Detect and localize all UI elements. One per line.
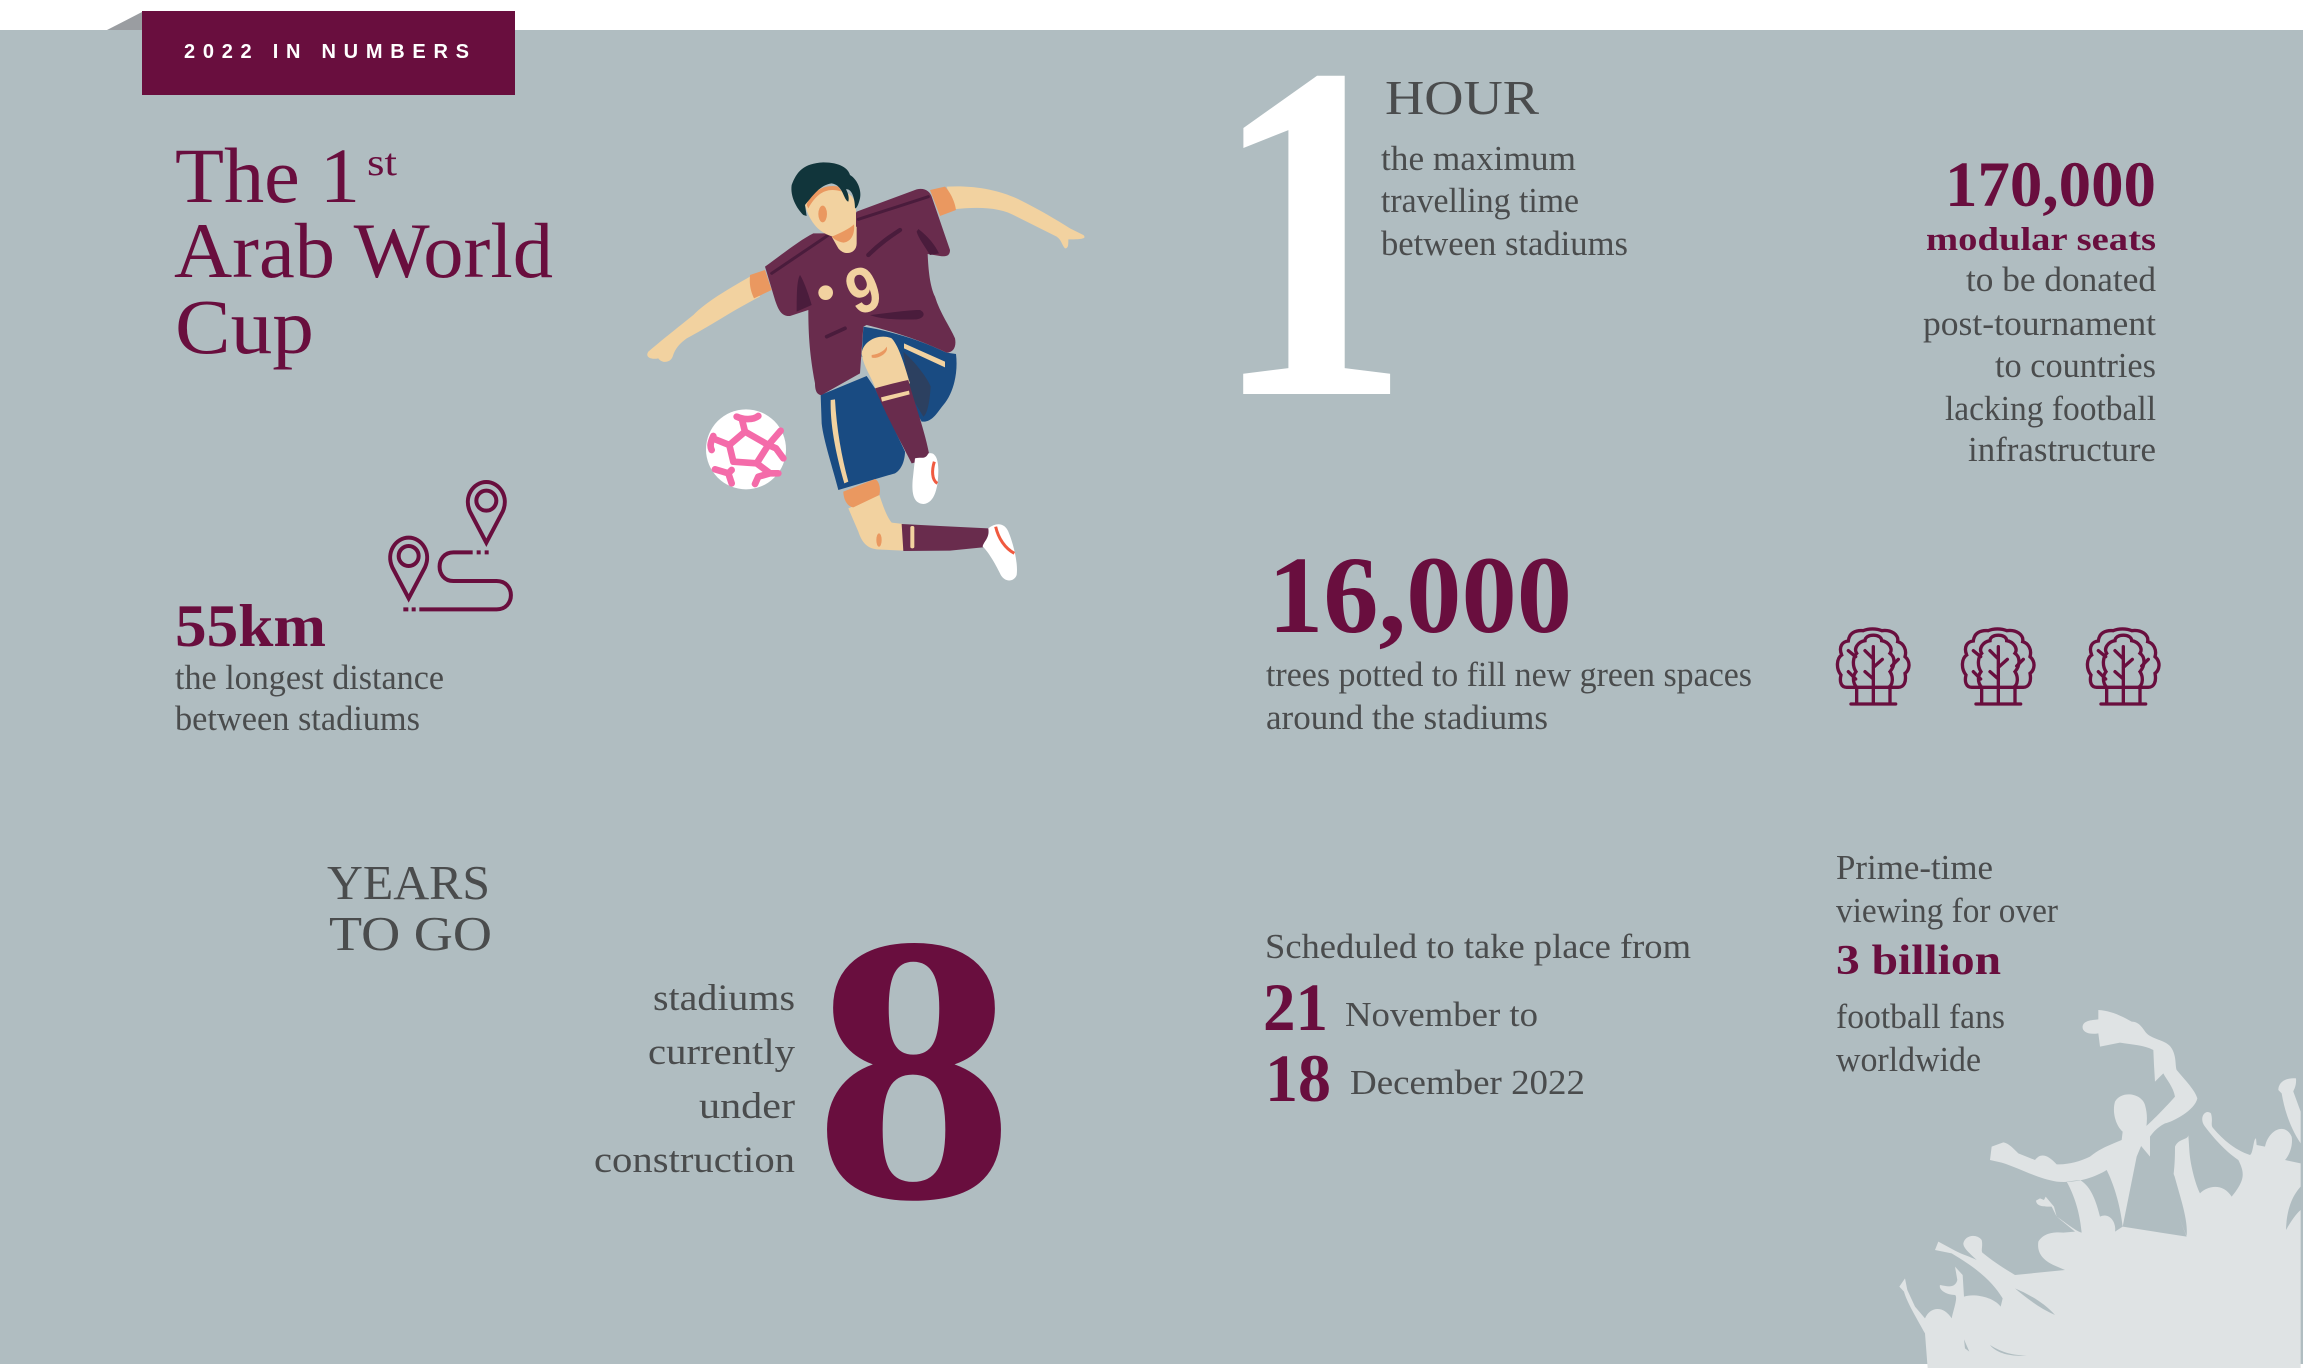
left arm: [647, 277, 760, 362]
16,000 trees stat: trees potted to fill new green spaces: [1266, 655, 1752, 694]
jersey: [765, 189, 955, 395]
hour stat: between stadiums: [1381, 224, 1628, 263]
jersey details: [772, 197, 939, 337]
tree icons: [1837, 629, 2159, 704]
hair: [791, 162, 860, 216]
modular seats stat: to countries: [1995, 346, 2156, 385]
route icon: [390, 482, 511, 609]
dates: November to: [1345, 995, 1538, 1034]
55km stat: the longest distance: [175, 658, 444, 697]
raised boot: [912, 453, 938, 504]
banner fold: [107, 12, 142, 30]
jersey number: 9: [836, 251, 891, 329]
dates: 21: [1263, 969, 1328, 1045]
title: Arab World: [174, 207, 553, 294]
modular seats stat: modular seats: [1926, 222, 2156, 258]
dates: Scheduled to take place from: [1265, 927, 1691, 966]
tree icon 3: [2087, 629, 2159, 704]
16,000 trees stat: around the stadiums: [1266, 698, 1548, 737]
jersey badge dot: [818, 285, 833, 300]
shorts: [821, 376, 905, 490]
55km stat: [175, 593, 444, 738]
16,000 trees stat: [1266, 534, 1752, 737]
tree icon 1: [1837, 629, 1909, 704]
crowd silhouette: [1899, 1010, 2301, 1368]
football player: [647, 162, 1085, 580]
top banner: [107, 11, 515, 95]
stadiums text: [594, 978, 796, 1181]
stadiums text: under: [699, 1086, 795, 1127]
dates: 18: [1265, 1040, 1331, 1116]
viewers stat: viewing for over: [1836, 891, 2058, 930]
hour stat: [1381, 70, 1628, 263]
tree icon 2: [1962, 629, 2034, 704]
big number 8: 8: [814, 857, 1014, 1280]
right arm: [947, 186, 1085, 248]
ball: [706, 409, 786, 489]
lower boot: [983, 524, 1017, 580]
years to go: [327, 855, 492, 961]
viewers stat: worldwide: [1836, 1040, 1981, 1079]
years to go: YEARS: [327, 855, 490, 910]
stadiums text: stadiums: [653, 978, 795, 1019]
16,000 trees stat: 16,000: [1268, 534, 1572, 656]
years to go: TO GO: [329, 906, 492, 961]
shorts stripes: [831, 343, 945, 483]
stadiums text: construction: [594, 1140, 795, 1181]
hour stat: the maximum: [1381, 139, 1576, 178]
banner label: 2022 IN NUMBERS: [184, 41, 469, 63]
hour stat: travelling time: [1381, 181, 1579, 220]
title: [174, 132, 553, 370]
dates: December 2022: [1350, 1063, 1585, 1102]
modular seats stat: post-tournament: [1923, 304, 2156, 343]
dates: [1263, 927, 1691, 1116]
lower thigh: [848, 495, 903, 551]
viewers stat: [1836, 848, 2058, 1079]
raised knee: [862, 337, 910, 390]
viewers stat: Prime-time: [1836, 848, 1993, 887]
cuffs: [750, 187, 956, 298]
viewers stat: football fans: [1836, 997, 2005, 1036]
modular seats stat: lacking football: [1945, 389, 2156, 428]
55km stat: between stadiums: [175, 699, 420, 738]
title: Cup: [175, 283, 314, 370]
55km stat: 55km: [175, 593, 326, 659]
hour stat: HOUR: [1385, 70, 1539, 125]
title: The 1: [175, 132, 360, 219]
banner box: [142, 11, 515, 95]
modular seats stat: 170,000: [1945, 149, 2156, 221]
raised sock: [875, 380, 930, 463]
face: [805, 187, 856, 237]
neck: [832, 227, 857, 253]
stadiums text: currently: [648, 1032, 796, 1073]
modular seats stat: [1923, 149, 2156, 469]
title: st: [367, 142, 398, 184]
modular seats stat: infrastructure: [1968, 430, 2156, 469]
viewers stat: 3 billion: [1836, 938, 2001, 984]
modular seats stat: to be donated: [1966, 260, 2156, 299]
lower sock: [902, 524, 990, 551]
